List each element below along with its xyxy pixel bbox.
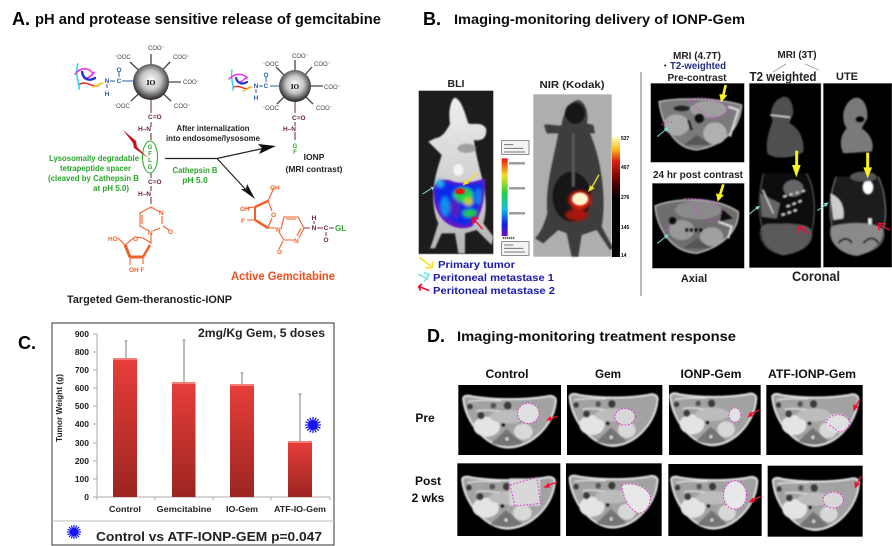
bar: Control	[113, 358, 137, 497]
y axis: 800	[75, 347, 89, 357]
legend divider	[52, 520, 334, 522]
MRI: IONP-Gem pre	[669, 385, 761, 455]
active gemcitabine structure: F	[241, 218, 245, 225]
nanoparticle left: iron oxide core with carboxyl groups: COO⁻	[148, 46, 165, 52]
column and row labels: IONP-Gem	[680, 367, 742, 381]
panel letter A: A.	[12, 9, 30, 29]
nanoparticle left: iron oxide core with carboxyl groups: COO⁻	[183, 80, 200, 86]
active gemcitabine structure: GL	[335, 224, 346, 233]
y axis: 400	[75, 419, 89, 429]
text: after internalization: into endosome/lysosome	[166, 134, 261, 143]
colour scale NIR: 145	[621, 225, 630, 231]
image: BLI mouse	[419, 91, 493, 254]
colour scale BLI	[502, 141, 529, 255]
linker left: H	[105, 91, 110, 98]
gemcitabine left	[108, 207, 173, 274]
tetrapeptide chain: H–N	[138, 126, 151, 133]
x labels: ATF-IO-Gem	[274, 504, 326, 514]
bar: Gemcitabine	[172, 382, 196, 497]
x labels: IO-Gem	[226, 504, 258, 514]
linker right: H	[254, 95, 259, 102]
column and row labels: 2 wks	[412, 491, 445, 505]
x axis	[97, 497, 330, 500]
MRI labels	[653, 49, 858, 285]
MRI labels: •	[664, 63, 667, 70]
column and row labels: Post	[415, 474, 441, 488]
tetrapeptide chain: G	[148, 145, 153, 151]
MRI: ATF-IONP-Gem pre	[766, 385, 863, 455]
nanoparticle right: IONP	[262, 54, 341, 112]
MRI: ATF-IONP-Gem post	[768, 466, 863, 537]
nanoparticle left: iron oxide core with carboxyl groups: ⁻OOC	[113, 104, 131, 110]
image: axial MRI post-contrast	[652, 183, 744, 268]
legend: arrows key: Peritoneal metastase 2	[433, 285, 555, 297]
image: coronal UTE MRI	[817, 83, 892, 267]
y axis: 200	[75, 456, 89, 466]
linker right	[254, 72, 279, 102]
colour scale NIR: 537	[621, 136, 630, 142]
nanoparticle left: iron oxide core with carboxyl groups: ⁻OOC	[114, 55, 132, 61]
tetrapeptide chain: C=O	[148, 179, 162, 186]
colour scale NIR	[612, 136, 630, 259]
colour scale NIR: 407	[621, 165, 630, 171]
active gemcitabine structure: OH	[270, 185, 280, 192]
MRI: IONP-Gem post	[668, 464, 762, 536]
label: IONP MRI contrast	[286, 152, 343, 174]
linker left: N	[105, 78, 110, 85]
y axis: 700	[75, 365, 89, 375]
y axis: 100	[75, 474, 89, 484]
colour scale NIR: 14	[621, 253, 627, 259]
text: lysosomally degradable spacer: tetrapeptide spacer	[60, 163, 132, 173]
nanoparticle right: IONP: ⁻OOC	[262, 62, 280, 68]
legend: arrows key: Primary tumor	[438, 259, 515, 271]
bar: ATF-IO-Gem	[288, 441, 312, 497]
active gemcitabine structure: O	[323, 237, 329, 244]
panel letter C: C.	[18, 333, 36, 353]
MRI: gem pre	[567, 385, 662, 455]
active gemcitabine structure	[240, 185, 346, 256]
icon: legend star	[67, 525, 81, 539]
gemcitabine left: O	[133, 236, 138, 243]
active gemcitabine structure: N	[276, 227, 281, 234]
residual peptide on IONP: F	[293, 150, 297, 156]
label BLI: BLI	[448, 78, 465, 90]
y axis	[75, 329, 97, 502]
residual peptide on IONP: H–N	[283, 126, 296, 133]
tetrapeptide chain: L	[148, 158, 152, 164]
dose label: 2mg/Kg Gem, 5 doses	[198, 328, 325, 340]
x labels: Gemcitabine	[156, 504, 212, 514]
panel C: tumor weight bar chart	[18, 323, 334, 545]
y axis: 600	[75, 383, 89, 393]
text: cathepsin B: pH 5.0	[182, 175, 208, 185]
panel letter D: D.	[427, 326, 445, 346]
nanoparticle left: iron oxide core with carboxyl groups: COO⁻	[174, 104, 191, 110]
active gemcitabine structure: O	[271, 212, 276, 219]
bar: IO-Gem	[230, 384, 254, 497]
divider between optical and MRI	[640, 72, 642, 296]
label NIR: NIR (Kodak)	[540, 79, 604, 91]
nanoparticle right: IONP: COO⁻	[314, 62, 331, 68]
column and row labels: Pre	[415, 411, 435, 425]
residual peptide on IONP: C=O	[292, 115, 306, 122]
tetrapeptide chain	[138, 100, 162, 204]
linker right: C	[264, 83, 269, 90]
tetrapeptide chain: G	[148, 165, 153, 171]
MRI labels: T2-weighted	[670, 61, 726, 72]
chart frame	[52, 323, 334, 545]
gemcitabine left: HO	[108, 236, 118, 243]
tetrapeptide chain: H–N	[138, 191, 151, 198]
text: lysosomally degradable spacer: (cleaved by Cathepsin B	[48, 173, 139, 183]
nanoparticle right: IONP: ⁻OOC	[262, 106, 280, 112]
targeting ligand right	[229, 70, 252, 91]
colour scale NIR: 276	[621, 195, 630, 201]
MRI: control post	[457, 463, 560, 536]
MRI labels: 24 hr post contrast	[653, 169, 743, 181]
heading A: pH and protease sensitive release of gemcitabine	[35, 12, 381, 28]
linker left: C	[117, 78, 122, 85]
y axis: 300	[75, 438, 89, 448]
nanoparticle left: iron oxide core with carboxyl groups: COO⁻	[173, 55, 190, 61]
icon: red cleavage bolt	[123, 130, 148, 158]
label: IONP MRI contrast: IONP	[304, 152, 325, 162]
label: active gemcitabine: Active Gemcitabine	[231, 269, 335, 283]
MRI labels: MRI (4.7T)	[673, 50, 721, 62]
linker right: N	[254, 83, 259, 90]
linker right: O	[263, 72, 269, 79]
text: lysosomally degradable spacer: at pH 5.0)	[93, 183, 129, 193]
gemcitabine left: N	[159, 210, 164, 217]
panel D: imaging-monitoring treatment response	[412, 326, 863, 537]
heading B: Imaging-monitoring delivery of IONP-Gem	[454, 12, 745, 27]
image: coronal T2 MRI	[749, 83, 821, 268]
MRI labels: Coronal	[792, 268, 840, 284]
column and row labels	[412, 367, 856, 505]
MRI labels: T2 weighted	[750, 70, 816, 84]
nanoparticle left: iron oxide core with carboxyl groups: IO	[147, 78, 156, 87]
active gemcitabine structure: O	[277, 249, 282, 256]
active gemcitabine structure: OH	[240, 206, 250, 213]
column and row labels: Gem	[595, 367, 621, 381]
gemcitabine left: OH F	[129, 267, 145, 274]
MRI labels: MRI (3T)	[778, 49, 816, 61]
residual peptide on IONP: G	[293, 144, 298, 150]
image: axial MRI pre-contrast	[651, 83, 744, 162]
x labels	[109, 504, 326, 514]
nanoparticle right: IONP: COO⁻	[324, 85, 341, 91]
linker left: O	[116, 67, 122, 74]
y axis: 500	[75, 401, 89, 411]
text: cathepsin B: Cathepsin B	[172, 165, 218, 175]
gemcitabine left: N	[148, 230, 153, 237]
panel A: pH and protease sensitive release	[12, 9, 381, 306]
heading D: Imaging-monitoring treatment response	[457, 329, 737, 344]
error bars	[124, 340, 302, 441]
tetrapeptide chain: F	[148, 152, 152, 158]
MRI labels: UTE	[836, 71, 858, 83]
active gemcitabine structure: H	[312, 215, 317, 222]
text: lysosomally degradable spacer: Lysosomally degradable	[49, 153, 139, 163]
panel B: imaging-monitoring delivery	[418, 9, 892, 297]
p-value legend: Control vs ATF-IONP-GEM p=0.047	[96, 530, 322, 544]
text: lysosomally degradable spacer	[48, 153, 139, 193]
nanoparticle right: IONP: IO	[291, 83, 300, 91]
text: after internalization	[166, 124, 261, 143]
active gemcitabine structure: N	[312, 225, 317, 232]
column and row labels: Control	[486, 367, 528, 381]
tetrapeptide chain: C=O	[148, 114, 162, 121]
targeting ligand left	[75, 64, 103, 89]
text: cathepsin B	[172, 165, 218, 185]
MRI labels: Axial	[681, 273, 707, 285]
legend: arrows key: Peritoneal metastase 1	[433, 272, 554, 284]
label: IONP MRI contrast: (MRI contrast)	[286, 164, 343, 174]
nanoparticle right: IONP: COO⁻	[292, 54, 309, 60]
panel letter B: B.	[423, 9, 441, 29]
icon: significance star	[305, 417, 321, 433]
MRI: gem post	[566, 463, 662, 536]
gemcitabine left: O	[168, 229, 173, 236]
image: NIR mouse	[533, 94, 613, 257]
active gemcitabine structure: C	[324, 225, 329, 232]
y axis: 900	[75, 329, 89, 339]
text: after internalization: After internalization	[176, 124, 250, 133]
legend: arrows key	[418, 257, 555, 297]
residual peptide on IONP	[283, 102, 306, 156]
label: targeted gem-theranostic IONP: Targeted Gem-theranostic-IONP	[67, 294, 232, 306]
MRI labels: Pre-contrast	[668, 72, 727, 84]
active gemcitabine structure: N	[294, 238, 299, 245]
y axis: 0	[84, 492, 89, 502]
column and row labels: ATF-IONP-Gem	[768, 367, 856, 381]
nanoparticle right: IONP: COO⁻	[316, 106, 333, 112]
y axis title: Tumor Weight (g)	[54, 374, 64, 442]
x labels: Control	[109, 504, 141, 514]
nanoparticle left: iron oxide core with carboxyl groups	[113, 46, 200, 110]
MRI: control pre	[458, 385, 561, 455]
linker left	[105, 67, 133, 98]
arrows: cleavage products	[165, 144, 276, 199]
